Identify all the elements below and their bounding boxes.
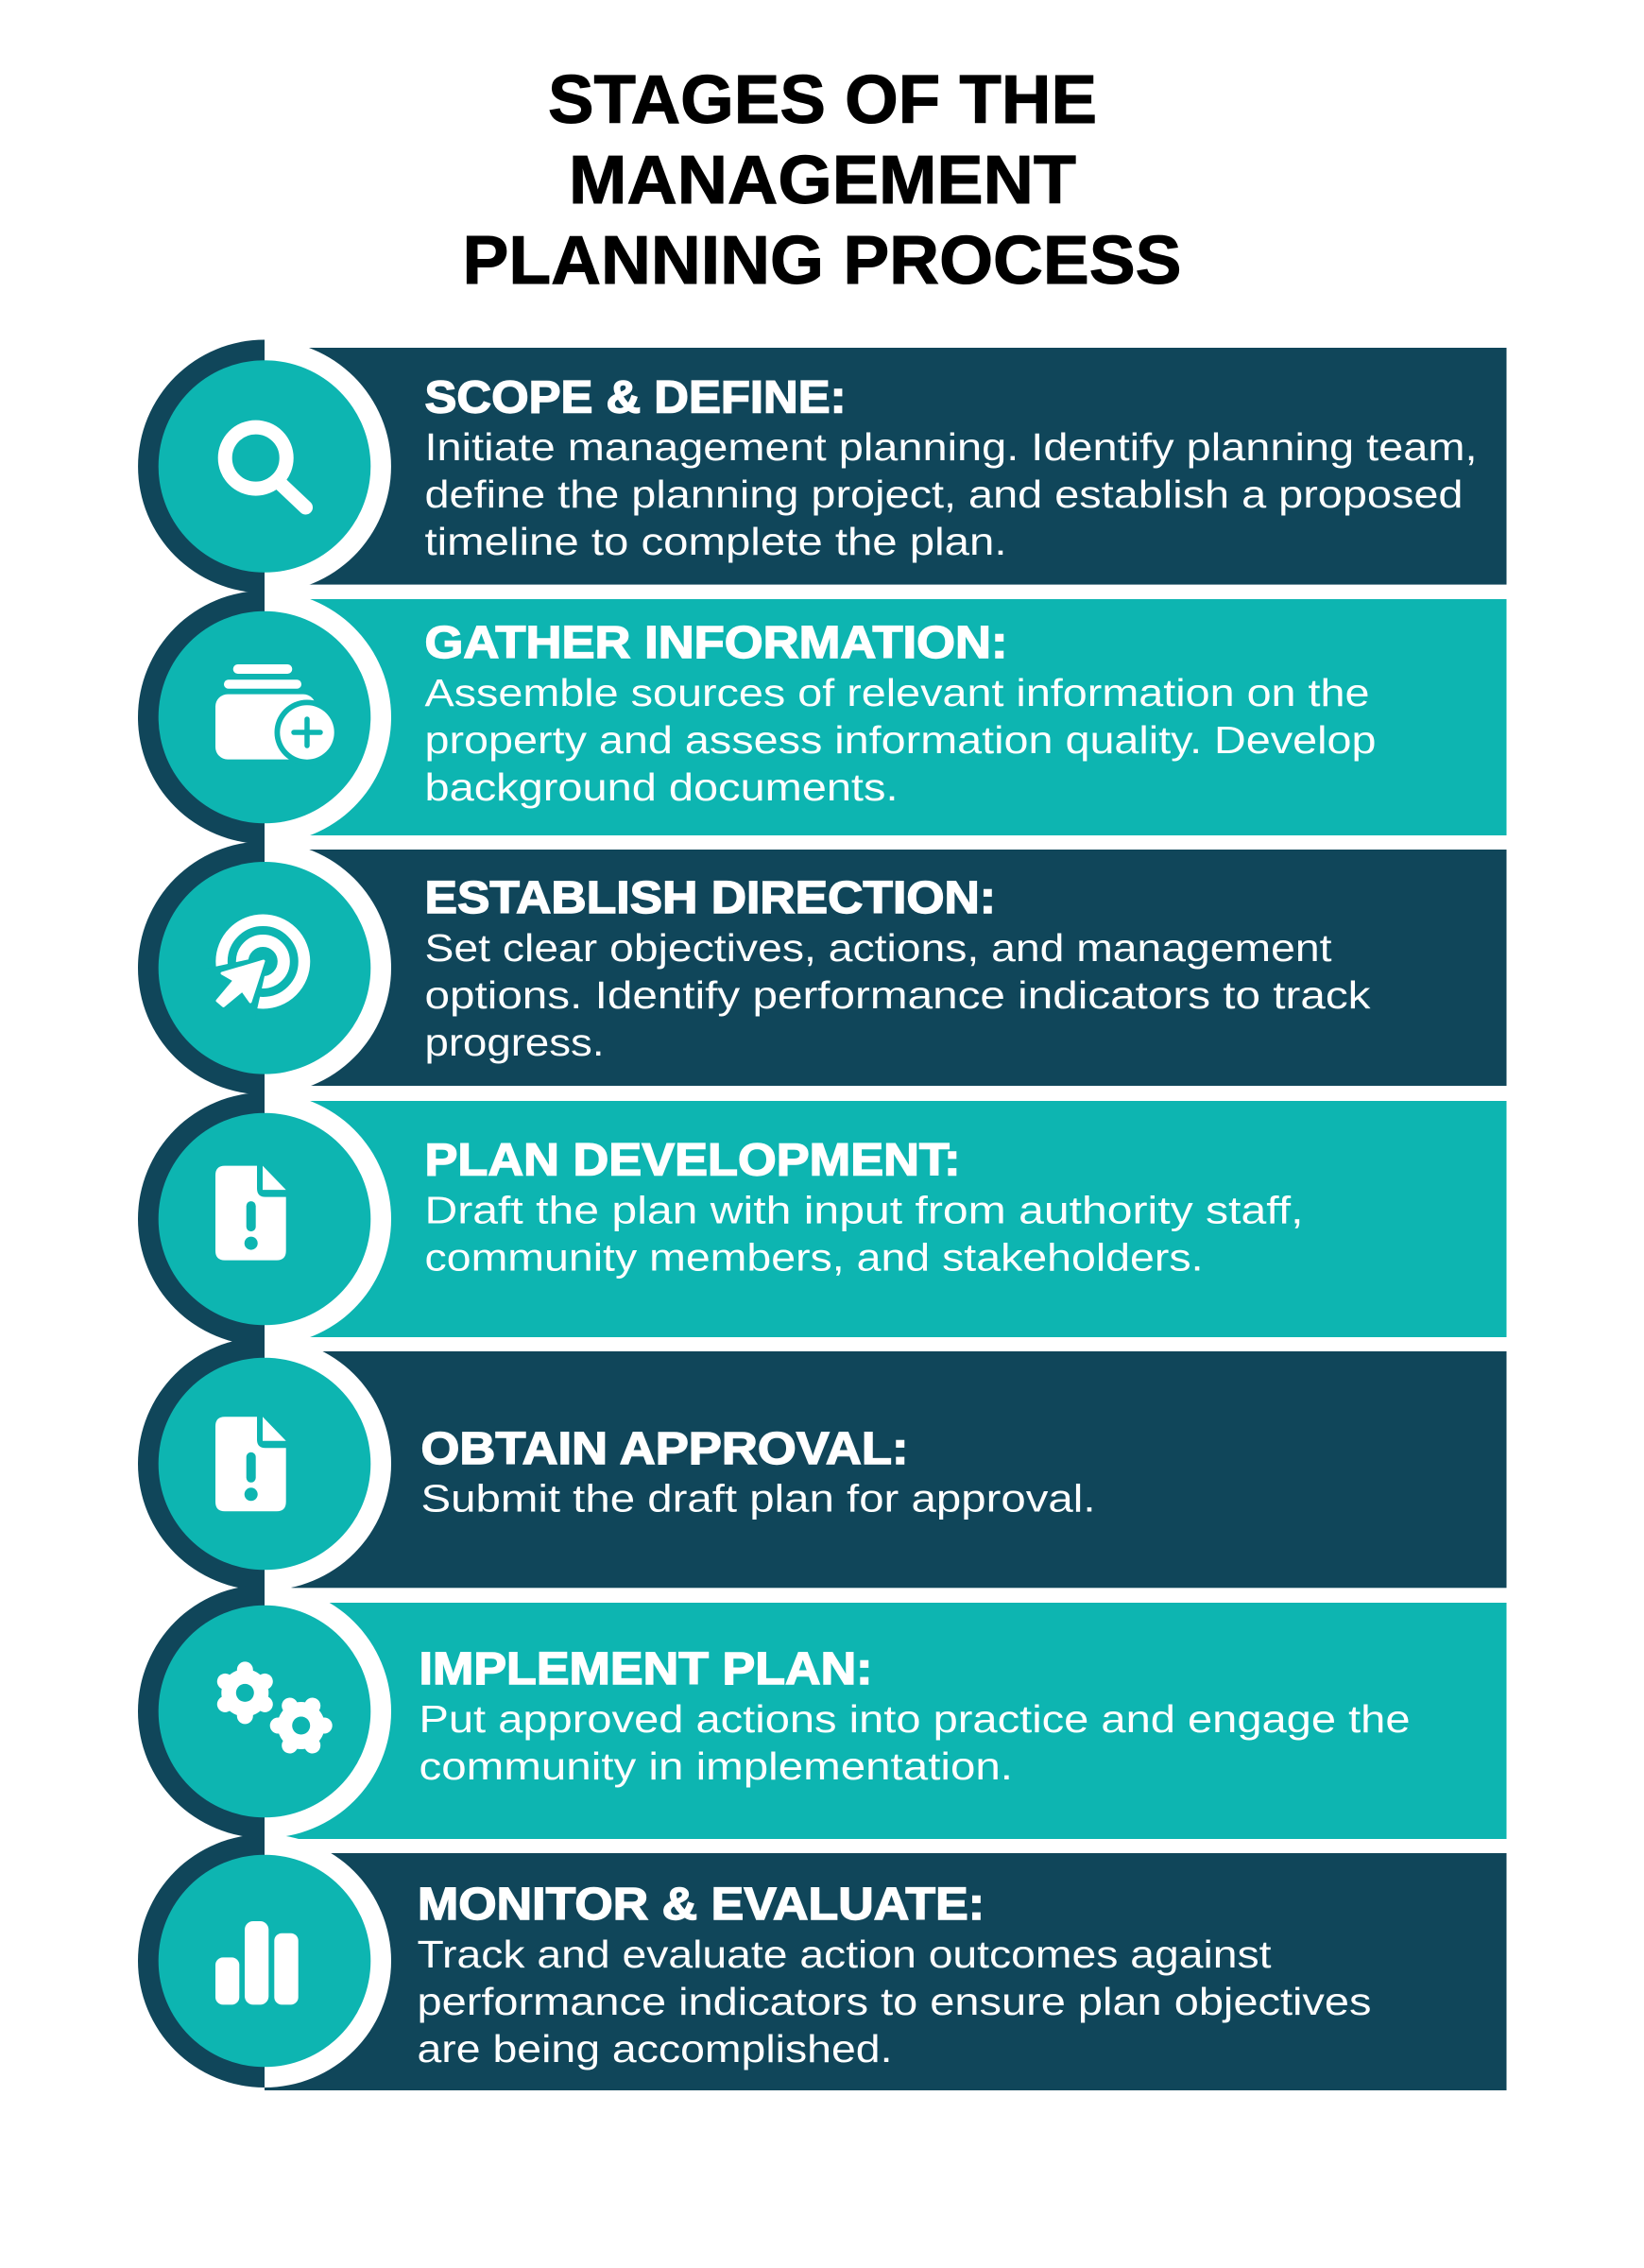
- heading: GATHER INFORMATION:: [425, 618, 1007, 668]
- band: [265, 348, 1506, 585]
- band: [265, 1853, 1506, 2090]
- panel: obtain approval: [138, 1337, 1506, 1590]
- heading: OBTAIN APPROVAL:: [421, 1424, 909, 1474]
- band: [265, 850, 1506, 1086]
- circle badge: [138, 1092, 391, 1346]
- body text: [425, 926, 1371, 1064]
- band: [265, 1101, 1506, 1337]
- title: STAGES OF THE: [548, 61, 1097, 138]
- body text: [420, 1697, 1410, 1788]
- icon: bar chart: [215, 1921, 299, 2004]
- heading: IMPLEMENT PLAN:: [420, 1644, 873, 1694]
- title: PLANNING PROCESS: [463, 222, 1181, 299]
- body text: [425, 671, 1376, 809]
- body text: Assemble sources of relevant information on the: [425, 671, 1370, 714]
- body text: [418, 1933, 1372, 2070]
- body text: background documents.: [425, 765, 898, 809]
- circle badge: [138, 841, 391, 1094]
- panel: gather information: [138, 591, 1506, 844]
- heading: ESTABLISH DIRECTION:: [425, 873, 996, 923]
- icon: folder with plus: [215, 664, 340, 765]
- circle badge: [138, 1834, 391, 2088]
- circle badge: [138, 1337, 391, 1590]
- panel: scope and define: [138, 340, 1506, 593]
- band: [265, 1603, 1506, 1839]
- icon: target with cursor: [206, 920, 304, 1022]
- icon: document with exclamation mark: [215, 1166, 286, 1261]
- circle badge: [138, 340, 391, 593]
- body text: community members, and stakeholders.: [425, 1235, 1204, 1279]
- body text: Initiate management planning. Identify planning team,: [425, 425, 1478, 469]
- body text: [425, 1188, 1304, 1279]
- heading: PLAN DEVELOPMENT:: [425, 1136, 960, 1185]
- body text: Put approved actions into practice and engage the: [420, 1697, 1410, 1741]
- panel: plan development: [138, 1092, 1506, 1346]
- body text: options. Identify performance indicators to track: [425, 973, 1371, 1017]
- body text: property and assess information quality. Develop: [425, 718, 1376, 762]
- body text: are being accomplished.: [418, 2027, 892, 2070]
- icon: gears: [221, 1669, 325, 1749]
- panel: implement plan: [138, 1585, 1506, 1839]
- body text: timeline to complete the plan.: [425, 520, 1007, 563]
- body text: define the planning project, and establish a proposed: [425, 472, 1463, 516]
- body text: Set clear objectives, actions, and management: [425, 926, 1332, 970]
- body text: [425, 425, 1478, 563]
- band: [265, 1351, 1506, 1588]
- panel: monitor and evaluate: [138, 1834, 1506, 2090]
- heading: SCOPE & DEFINE:: [425, 372, 847, 423]
- circle badge: [138, 591, 391, 844]
- body text: Draft the plan with input from authority staff,: [425, 1188, 1304, 1231]
- band: [265, 599, 1506, 835]
- body text: community in implementation.: [420, 1744, 1013, 1788]
- body text: performance indicators to ensure plan objectives: [418, 1980, 1372, 2023]
- panel: establish direction: [138, 841, 1506, 1094]
- icon: document with exclamation mark: [215, 1417, 286, 1511]
- icon: magnifying glass: [225, 427, 306, 507]
- body text: progress.: [425, 1021, 605, 1064]
- heading: MONITOR & EVALUATE:: [418, 1880, 985, 1930]
- circle badge: [138, 1585, 391, 1838]
- body text: Submit the draft plan for approval.: [421, 1477, 1096, 1521]
- title: MANAGEMENT: [569, 142, 1076, 218]
- body text: Track and evaluate action outcomes against: [418, 1933, 1272, 1976]
- title: [463, 61, 1181, 299]
